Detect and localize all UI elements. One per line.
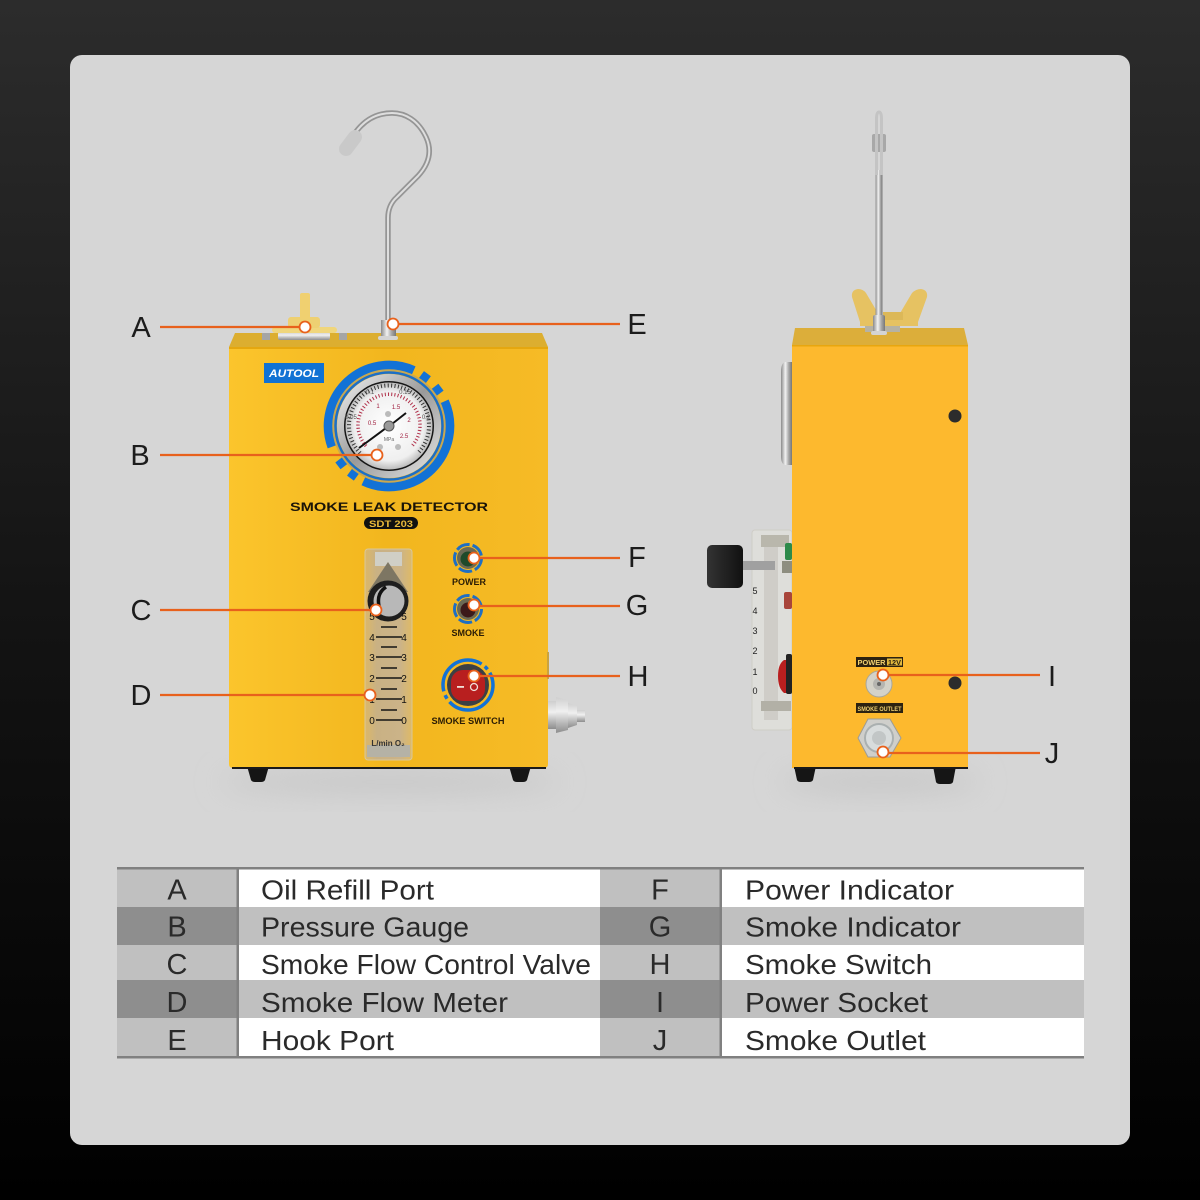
table part names: Smoke Flow Meter (261, 987, 508, 1018)
tube caps (375, 552, 402, 566)
side LED green (785, 543, 792, 560)
callout C: C (131, 595, 151, 627)
table key letters: J (653, 1025, 667, 1057)
table part names: Pressure Gauge (261, 912, 469, 942)
knob mark (378, 587, 386, 610)
flow meter (365, 549, 412, 760)
flow scale numbers: 2 (369, 674, 375, 685)
smoke outlet label: SMOKE OUTLET (858, 706, 902, 713)
smoke outlet label (856, 703, 903, 713)
side hook (872, 112, 886, 322)
table part names: Hook Port (261, 1025, 394, 1056)
gauge black rim (344, 381, 434, 471)
gauge numbers: 2.5 (400, 434, 409, 440)
callouts (130, 309, 1059, 770)
chrome bezel (337, 374, 441, 478)
table part names: Smoke Outlet (745, 1025, 926, 1056)
smoke outlet hex fitting (858, 719, 901, 757)
gauge numbers: 0.2 (422, 415, 431, 421)
callout F (468, 542, 646, 574)
flow scale numbers: 2 (401, 674, 407, 685)
table part names: Oil Refill Port (261, 874, 434, 906)
side enclosure (792, 328, 968, 769)
table key letters: I (656, 987, 664, 1019)
callout B: B (130, 440, 150, 472)
table key letters: C (167, 949, 187, 981)
flow scale numbers (369, 612, 407, 727)
valve cone (368, 562, 408, 592)
wing nut (852, 289, 927, 326)
callout B (130, 440, 382, 472)
table key letters (167, 874, 671, 1057)
parts legend table (117, 867, 1084, 1058)
gold ring (334, 370, 444, 482)
flow meter side (707, 530, 792, 730)
table key letters: F (651, 874, 669, 906)
table cell backgrounds (117, 869, 1084, 1056)
valve knob (368, 580, 408, 622)
side scale numbers: 2 (752, 646, 758, 656)
flow unit label: L/min O₂ (371, 739, 405, 748)
flow scale ticks (376, 627, 402, 720)
side switch (778, 660, 791, 693)
table key letters: A (167, 874, 187, 906)
AUTOOL logo (264, 363, 324, 383)
flow scale numbers: 0 (369, 716, 375, 727)
gauge numbers (345, 390, 431, 443)
side scale numbers: 1 (752, 667, 758, 677)
power label: POWER (452, 577, 486, 587)
oil refill cap (262, 293, 347, 340)
gauge numbers: 0.5 (368, 421, 377, 427)
table part names: Smoke Indicator (745, 912, 961, 942)
model badge (364, 517, 418, 530)
flow tube (365, 549, 412, 760)
flow scale numbers: 1 (401, 695, 407, 706)
table key letters: H (650, 949, 670, 981)
flow scale numbers: 1 (369, 695, 375, 706)
smoke switch label: SMOKE SWITCH (432, 716, 504, 726)
callout D (131, 680, 376, 712)
power 12V label: 12V (888, 660, 901, 667)
floor shadow: side (780, 772, 980, 792)
pressure gauge (328, 365, 450, 487)
AUTOOL logo: AUTOOL (268, 368, 319, 380)
flow scale numbers: 5 (369, 612, 375, 623)
gauge numbers: 0.1 (366, 390, 375, 396)
side port base (865, 300, 900, 335)
callout G (468, 590, 648, 622)
table part names: Smoke Flow Control Valve (261, 949, 591, 980)
smoke label: SMOKE (451, 628, 485, 638)
inner blue ring (336, 372, 442, 480)
callout H (468, 661, 648, 693)
side scale numbers (752, 586, 758, 696)
flow scale numbers: 0 (401, 716, 407, 727)
gauge numbers: 0.05 (345, 415, 357, 421)
gauge face (346, 382, 432, 470)
tube bottom band (761, 701, 791, 711)
table rules (117, 867, 1084, 1058)
model badge: SDT 203 (369, 519, 413, 530)
side LED red (784, 592, 792, 609)
product title: SMOKE LEAK DETECTOR (290, 502, 489, 514)
gauge needle (359, 413, 406, 448)
knob face (374, 586, 404, 616)
floor shadow: front (220, 772, 560, 792)
inner tube (764, 540, 778, 720)
flow scale numbers: 3 (369, 653, 375, 664)
callout J (878, 738, 1059, 770)
flow scale numbers: 3 (401, 653, 407, 664)
feet (247, 766, 531, 782)
hook port base (378, 320, 398, 340)
front view of smoke leak detector (220, 113, 585, 792)
gauge screws (377, 411, 401, 450)
table key letters: G (649, 912, 671, 944)
power 12V label (856, 657, 903, 667)
side collar (782, 561, 792, 573)
hook (346, 113, 429, 330)
gauge numbers: 1 (376, 404, 380, 410)
table key letters: E (167, 1025, 187, 1057)
callout G: G (626, 590, 648, 622)
side scale numbers: 3 (752, 626, 758, 636)
callout E: E (627, 309, 647, 341)
gauge numbers: 0.15 (399, 390, 411, 396)
table part names: Smoke Switch (745, 949, 932, 980)
blue decorative ring (328, 365, 450, 487)
smoke indicator (454, 596, 482, 622)
gauge numbers: MPa (384, 437, 394, 443)
side feet (794, 766, 956, 784)
valve stem (742, 561, 775, 570)
tube base (367, 745, 410, 757)
callout H: H (628, 661, 648, 693)
clear tube (752, 530, 792, 730)
side scale numbers: 5 (752, 586, 758, 596)
side screws (948, 410, 962, 690)
callout F: F (628, 542, 646, 574)
power socket (866, 671, 892, 697)
gauge numbers: 2 (407, 418, 411, 424)
power 12V label: POWER (858, 660, 886, 667)
side switch back (786, 654, 792, 694)
callout C (131, 595, 382, 627)
callout D: D (131, 680, 151, 712)
callout A: A (131, 312, 151, 344)
flow scale numbers: 4 (369, 633, 375, 644)
side outlet fitting (547, 652, 585, 733)
table part names (261, 874, 961, 1056)
table key letters: D (167, 987, 187, 1019)
callout I (878, 661, 1056, 693)
smoke switch (443, 660, 493, 710)
side scale numbers: 4 (752, 606, 758, 616)
callout A (131, 312, 310, 344)
side scale numbers: 0 (752, 686, 758, 696)
gauge numbers: 1.5 (392, 405, 401, 411)
flow scale numbers: 5 (401, 612, 407, 623)
black knob (707, 545, 743, 588)
table part names: Power Socket (745, 987, 928, 1018)
gauge scales (349, 385, 429, 453)
power indicator (454, 544, 482, 572)
callout E (388, 309, 647, 341)
callout J: J (1045, 738, 1059, 770)
yellow enclosure (229, 333, 548, 769)
table part names: Power Indicator (745, 874, 954, 906)
callout I: I (1048, 661, 1056, 693)
side view of smoke leak detector (707, 112, 980, 792)
table key letters: B (167, 912, 187, 944)
flow scale numbers: 4 (401, 633, 407, 644)
gauge back (781, 362, 792, 465)
tube top band (761, 535, 789, 547)
